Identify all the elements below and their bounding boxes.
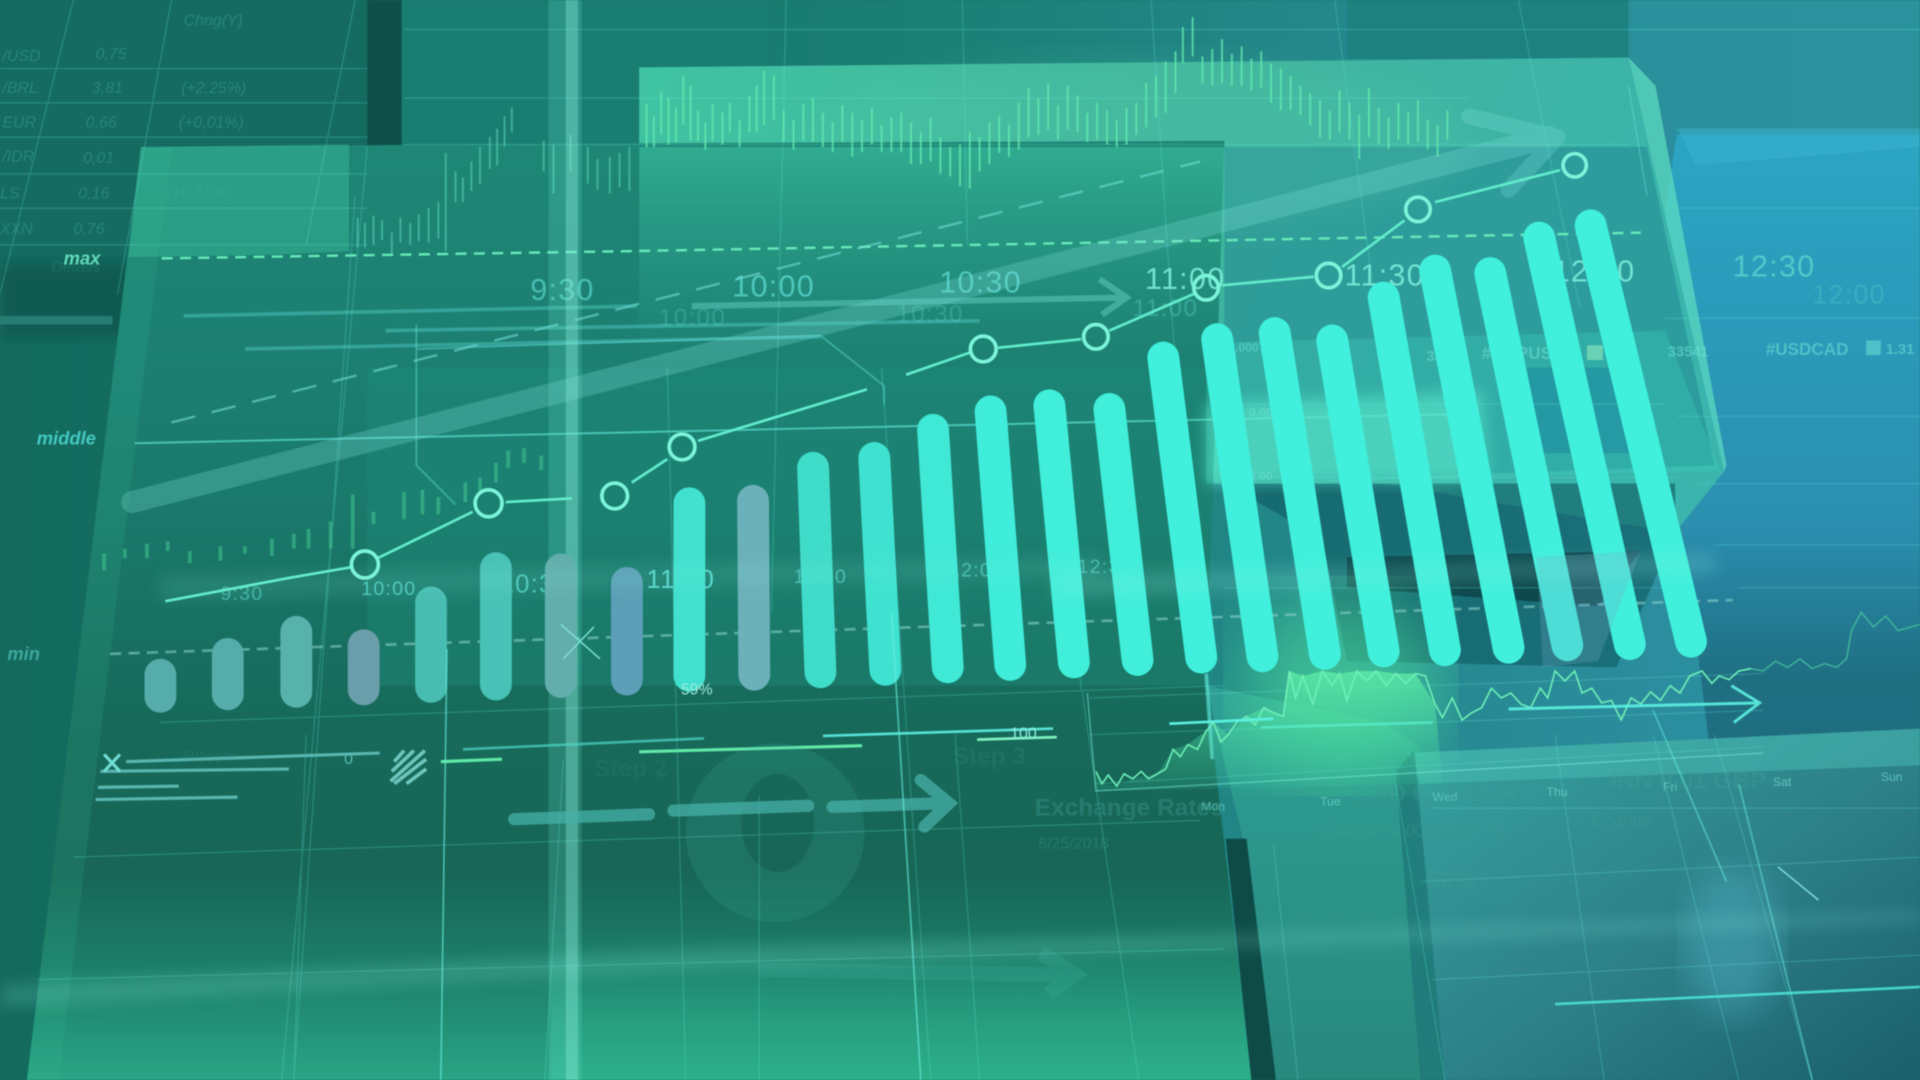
dark gap bbox=[1226, 839, 1276, 1080]
faint table text: 3,81 bbox=[92, 80, 123, 97]
faint table text: (+0,33%) bbox=[167, 184, 232, 201]
icon: cross marks bbox=[561, 624, 1818, 900]
bar overlay: translucent section bbox=[1537, 551, 1641, 667]
faint table text: /IDR bbox=[1, 149, 34, 166]
step arrow bbox=[514, 780, 949, 827]
axis labels: max bbox=[64, 247, 101, 268]
vertical light column bbox=[549, 0, 582, 1080]
faint lower labels: 8/25/2018 bbox=[1038, 836, 1109, 853]
time labels: 10:30 bbox=[939, 266, 1022, 300]
day labels: Sat bbox=[1773, 775, 1792, 789]
faint table text: 0,75 bbox=[96, 46, 127, 63]
faint lower labels bbox=[184, 743, 1767, 894]
time labels: 12:00 bbox=[1553, 255, 1635, 289]
line chart with markers bbox=[165, 154, 1586, 601]
lower faint arrow bbox=[759, 953, 1075, 994]
legend block bbox=[96, 751, 380, 800]
lower candlestick chart bbox=[104, 448, 541, 571]
panel: top centre bbox=[402, 0, 769, 165]
right arrow bbox=[1509, 686, 1760, 722]
ticker text: 33541 bbox=[1668, 344, 1709, 360]
faint lower labels: Step 3 bbox=[953, 743, 1026, 770]
axis labels: middle bbox=[37, 427, 96, 448]
day labels: Mon bbox=[1201, 800, 1225, 814]
faint table text: LS bbox=[0, 185, 20, 202]
time labels: 9:30 bbox=[530, 273, 595, 307]
faint lower labels: IRN 0,01 GBP bbox=[1610, 768, 1767, 795]
panel: bright top green bbox=[639, 58, 1920, 533]
faint table text: Details bbox=[51, 259, 100, 276]
faint table text: EUR bbox=[2, 114, 36, 131]
bright verticals bbox=[441, 86, 1812, 1080]
faint table text: XXN bbox=[0, 221, 33, 238]
bars bbox=[160, 225, 1691, 697]
horizontal middle line bbox=[135, 414, 1469, 443]
small values: 100 bbox=[1010, 725, 1037, 742]
donut chart bbox=[686, 743, 864, 922]
time labels: 10:30 bbox=[896, 301, 964, 328]
panel: centre lower bbox=[1206, 686, 1445, 1080]
faint table text: (+2,25%) bbox=[181, 80, 246, 97]
dark band behind bars bbox=[1206, 331, 1720, 667]
time labels: 12:00 bbox=[1812, 280, 1886, 310]
day labels: Fri bbox=[1663, 780, 1677, 794]
icon: close mark bbox=[104, 754, 120, 771]
time labels: 10:30 bbox=[500, 571, 570, 599]
ticker text: 0.00 bbox=[1249, 405, 1273, 419]
faint lower labels: 52% bbox=[1427, 867, 1476, 894]
day labels bbox=[1201, 770, 1903, 814]
faint lower labels: Step 2 bbox=[594, 755, 667, 782]
ticker text: #USDCAD bbox=[1766, 339, 1849, 359]
ticker text: #GBPUSD bbox=[1482, 343, 1564, 363]
time labels: 10:00 bbox=[659, 305, 726, 332]
day labels: Sun bbox=[1881, 770, 1903, 784]
ticker text: 33541 bbox=[1427, 349, 1467, 365]
time labels: 11:00 bbox=[647, 566, 715, 594]
small values: 59% bbox=[681, 681, 713, 698]
faint table text: /USD bbox=[1, 48, 40, 65]
day labels: Wed bbox=[1433, 790, 1458, 804]
faint lower labels: Bitcoin bbox=[184, 749, 238, 766]
ticker text bbox=[1228, 339, 1914, 483]
top candlestick chart bbox=[647, 17, 1447, 189]
panel: far right blue bbox=[1347, 0, 1920, 1080]
time labels: 12:30 bbox=[1078, 556, 1133, 578]
panel: lower right bbox=[1396, 729, 1920, 1080]
axis labels bbox=[7, 247, 101, 664]
ticker text: 0.00 bbox=[1249, 469, 1273, 483]
faint table text: 0,66 bbox=[86, 114, 117, 131]
day labels: Tue bbox=[1320, 795, 1341, 809]
dashed max line bbox=[162, 233, 1641, 258]
dashed min line bbox=[110, 600, 1733, 654]
axis labels: min bbox=[7, 643, 40, 664]
time labels: 10:00 bbox=[732, 269, 815, 303]
sparkline area bbox=[1087, 612, 1920, 791]
horizontal dashes bbox=[184, 306, 980, 349]
left candlestick chart bbox=[358, 108, 629, 255]
short accent lines bbox=[441, 719, 1920, 1004]
faint lower labels: Exchange Rates bbox=[1035, 795, 1224, 822]
time labels: 12:30 bbox=[1733, 250, 1815, 284]
time labels: 12:00 bbox=[949, 560, 1004, 582]
panel: top left rates table bbox=[0, 0, 403, 337]
faint table text: /BRL bbox=[1, 80, 38, 97]
green glow bbox=[1243, 594, 1439, 778]
dark strip bbox=[367, 0, 403, 214]
arrow near 10:30 bbox=[692, 279, 1127, 315]
faint table text: Chng(Y) bbox=[184, 13, 243, 30]
time labels: 11:30 bbox=[1344, 258, 1425, 292]
ticker text: 0.000750 bbox=[1228, 340, 1279, 354]
time labels bbox=[220, 250, 1886, 605]
time labels: 10:00 bbox=[361, 578, 416, 600]
data points bbox=[351, 154, 1586, 578]
faint table text: 0,01 bbox=[83, 150, 114, 167]
small values bbox=[681, 681, 1037, 742]
dashed trend line bbox=[171, 162, 1200, 422]
time labels: 11:30 bbox=[793, 566, 847, 588]
ticker text: 1.31 bbox=[1886, 342, 1914, 358]
time labels: 9:30 bbox=[220, 583, 263, 605]
faint lower labels: Change bbox=[1592, 809, 1652, 829]
time labels: 11:00 bbox=[1145, 262, 1225, 296]
legend block: 0 bbox=[344, 751, 353, 768]
faint table text: (+0,01%) bbox=[179, 114, 244, 131]
faint lower labels: Change +0.0037(0.01%) bbox=[1316, 820, 1503, 840]
faint table text: 0,16 bbox=[78, 185, 109, 202]
outline plate bbox=[416, 324, 884, 504]
light streaks bbox=[0, 553, 1920, 1007]
day labels: Thu bbox=[1547, 785, 1568, 799]
panel: main chart plate bbox=[27, 141, 1251, 1080]
faint table text: 0,76 bbox=[73, 221, 105, 238]
icon: hatch block bbox=[391, 751, 426, 784]
time labels: 11:00 bbox=[1133, 295, 1198, 322]
faint lower labels: CAD 0,66 EUR bbox=[1353, 780, 1519, 807]
faint table text bbox=[0, 13, 246, 276]
big trend arrow bbox=[132, 116, 1558, 502]
